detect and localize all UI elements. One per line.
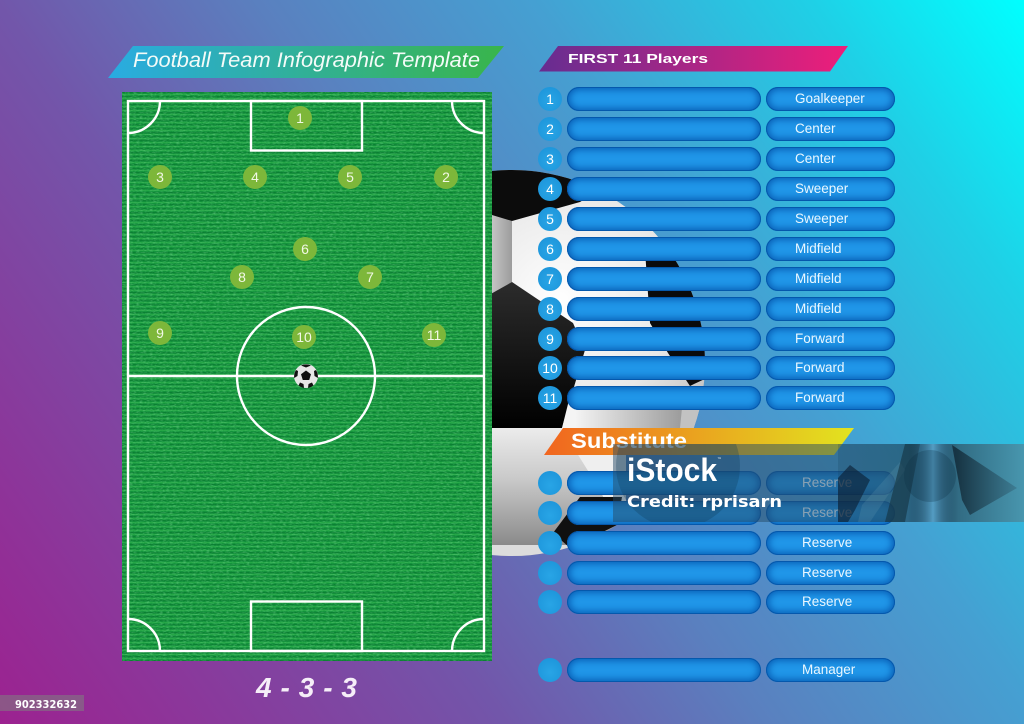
- player row 10: Forward: [795, 360, 845, 375]
- substitute row 4: Reserve: [802, 565, 852, 580]
- player row 8: Midfield: [795, 301, 842, 316]
- player row 3: [538, 147, 895, 171]
- substitute row 5: Reserve: [802, 594, 852, 609]
- watermark: iStock credit: ™: [717, 457, 722, 463]
- player row 5: [538, 207, 895, 231]
- player row 6: Midfield: [795, 241, 842, 256]
- player row 1: Goalkeeper: [795, 91, 865, 106]
- player markers on pitch: 7: [366, 269, 374, 285]
- panel: football pitch: [122, 92, 492, 661]
- heading: substitute: Substitute: [571, 430, 687, 453]
- substitute row 2: Reserve: [802, 505, 852, 520]
- player row 11: [538, 386, 895, 410]
- manager row: [538, 658, 895, 682]
- manager row: Manager: [802, 662, 855, 677]
- watermark: iStock credit: iStock: [627, 452, 717, 488]
- watermark: iStock credit: Credit: rprisarn: [627, 492, 782, 511]
- watermark: iStock credit: [613, 444, 1024, 522]
- player markers on pitch: 11: [427, 327, 441, 343]
- formation label: 4 - 3 - 3: [255, 672, 357, 703]
- heading: first 11 players: [539, 46, 848, 72]
- player markers on pitch: 5: [346, 169, 354, 185]
- player row 7: Midfield: [795, 271, 842, 286]
- player row 7: [538, 267, 895, 291]
- player row 8: 8: [546, 301, 554, 317]
- player row 5: 5: [546, 211, 554, 227]
- player markers on pitch: 2: [442, 169, 450, 185]
- player row 1: 1: [546, 91, 554, 107]
- player markers on pitch: 10: [296, 329, 312, 345]
- player row 10: 10: [542, 360, 558, 376]
- substitute row 3: Reserve: [802, 535, 852, 550]
- player row 2: [538, 117, 895, 141]
- player markers on pitch: 8: [238, 269, 246, 285]
- player row 1: [538, 87, 895, 111]
- player row 5: Sweeper: [795, 211, 848, 226]
- player markers on pitch: [148, 106, 458, 349]
- player row 3: Center: [795, 151, 836, 166]
- player row 4: [538, 177, 895, 201]
- player row 9: 9: [546, 331, 554, 347]
- heading: substitute: [544, 428, 854, 455]
- substitute row 1: Reserve: [802, 475, 852, 490]
- player row 4: Sweeper: [795, 181, 848, 196]
- player row 9: Forward: [795, 331, 845, 346]
- substitute row 2: [538, 501, 895, 525]
- substitute row 4: [538, 561, 895, 585]
- player markers on pitch: 9: [156, 325, 164, 341]
- player row 2: Center: [795, 121, 836, 136]
- substitute row 3: [538, 531, 895, 555]
- heading: first 11 players: FIRST 11 Players: [568, 51, 708, 66]
- player markers on pitch: 4: [251, 169, 259, 185]
- player markers on pitch: 6: [301, 241, 309, 257]
- player row 6: [538, 237, 895, 261]
- player row 3: 3: [546, 151, 554, 167]
- player row 11: 11: [543, 390, 557, 406]
- player row 11: Forward: [795, 390, 845, 405]
- player row 6: 6: [546, 241, 554, 257]
- player row 10: [538, 356, 895, 380]
- icon: small soccer ball: [294, 364, 318, 388]
- player row 8: [538, 297, 895, 321]
- player row 4: 4: [546, 181, 554, 197]
- image id tag: 902332632: [15, 698, 77, 711]
- substitute row 1: [538, 471, 895, 495]
- large soccer ball: [492, 170, 705, 556]
- player row 7: 7: [546, 271, 554, 287]
- title banner: [108, 46, 504, 78]
- player markers on pitch: 3: [156, 169, 164, 185]
- player row 9: [538, 327, 895, 351]
- title banner: Football Team Infographic Template: [133, 49, 480, 72]
- player row 2: 2: [546, 121, 554, 137]
- player markers on pitch: 1: [296, 110, 304, 126]
- substitute row 5: [538, 590, 895, 614]
